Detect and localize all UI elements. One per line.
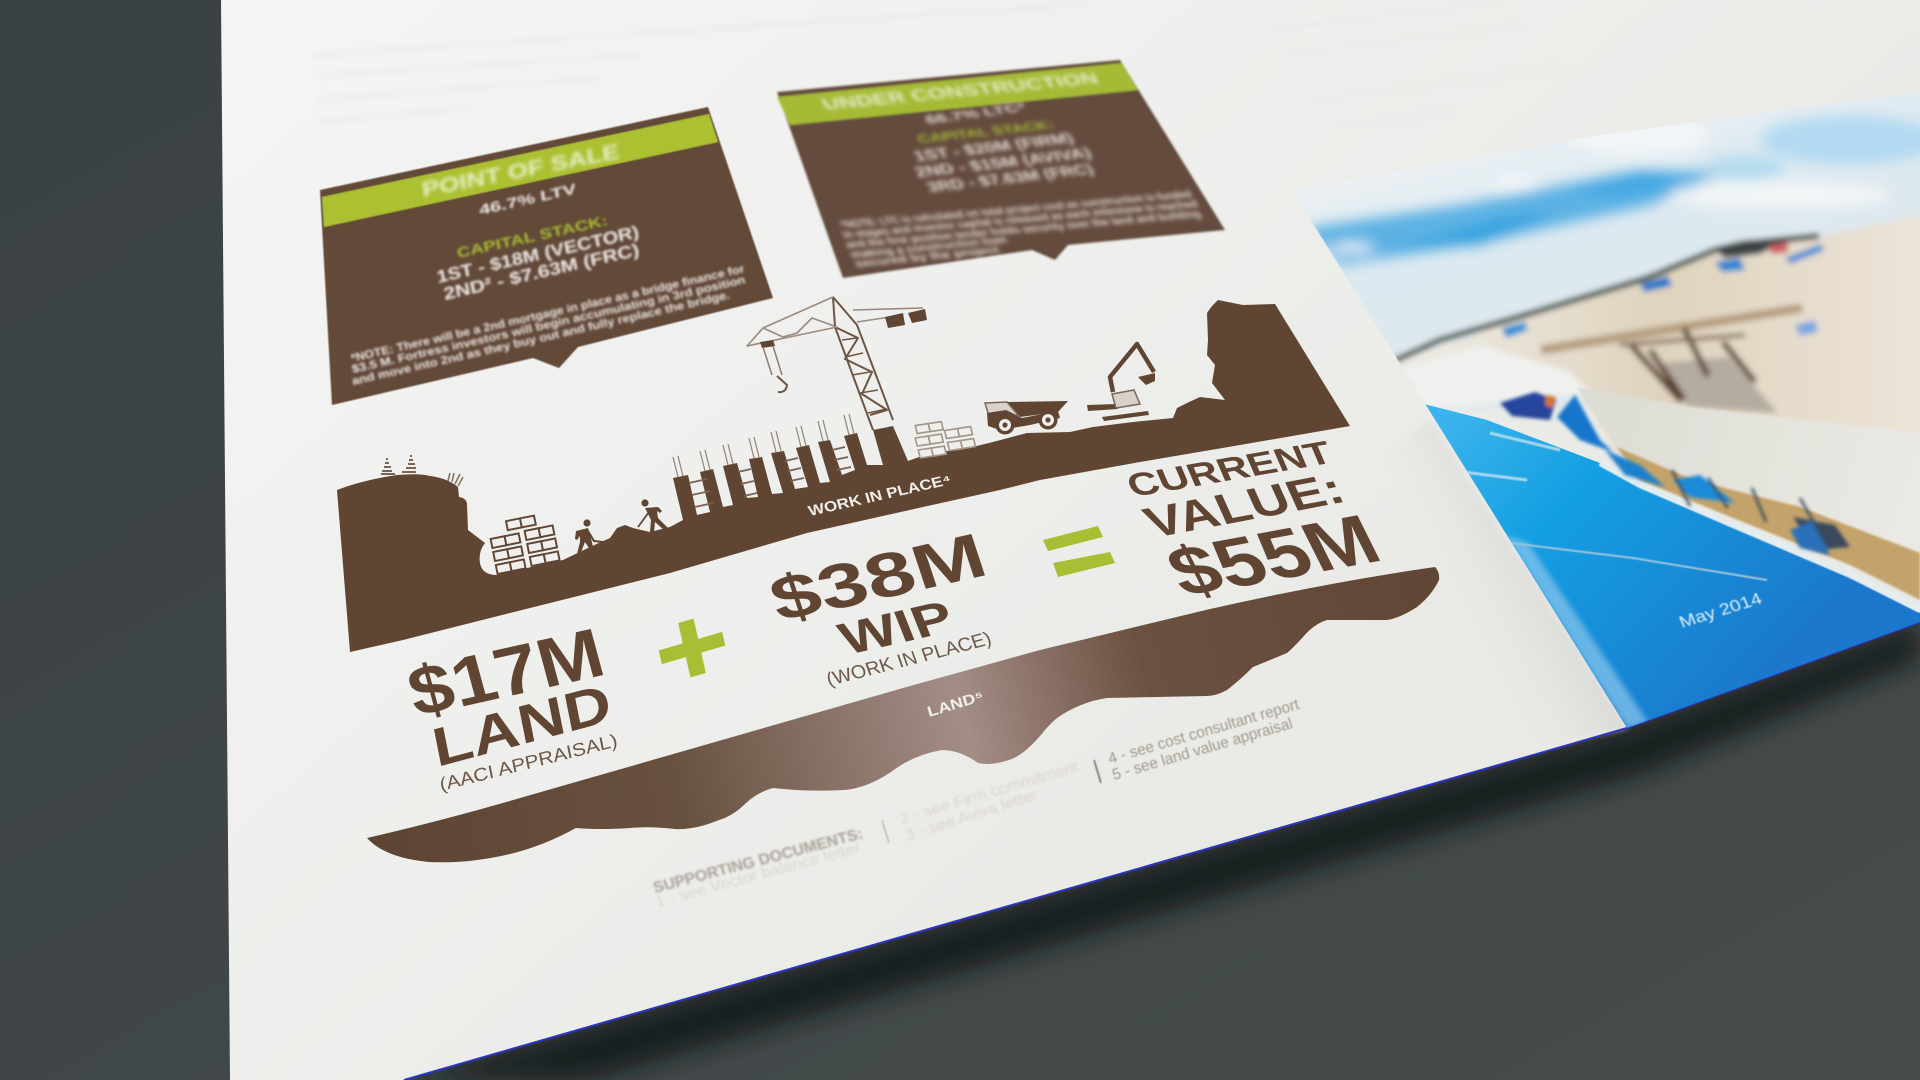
under construction text block: 2ND - $15M (AVIVA) bbox=[912, 146, 1095, 180]
under construction text block bbox=[838, 100, 1203, 270]
panel: point of sale bbox=[320, 107, 773, 405]
wip subheading: (WORK IN PLACE) bbox=[823, 627, 994, 690]
under construction text block: *NOTE: LTC is calculated on total project cost as construction is funded bbox=[838, 189, 1194, 231]
work in place land silhouette with columns bbox=[337, 300, 1350, 652]
retaining wall bbox=[1577, 387, 1920, 553]
value heading: VALUE: bbox=[1137, 465, 1352, 548]
blue tarps and debris bbox=[1500, 392, 1850, 555]
cover photo: construction site bbox=[1280, 80, 1920, 728]
wip heading: WIP bbox=[832, 592, 961, 665]
equation: land value bbox=[400, 614, 619, 795]
footnote column two bbox=[898, 758, 1081, 845]
equation: current value bbox=[1121, 434, 1393, 611]
under construction text block: 1ST - $20M (FIRM) bbox=[911, 131, 1077, 164]
point of sale text block: CAPITAL STACK: bbox=[455, 212, 609, 261]
site structure bbox=[1660, 357, 1778, 413]
icon: dump truck bbox=[985, 401, 1068, 434]
equation: work in place value: $38M bbox=[761, 520, 995, 636]
equation: work in place value bbox=[761, 520, 995, 690]
sky bbox=[1280, 80, 1920, 410]
point of sale heading: POINT OF SALE bbox=[421, 140, 621, 202]
tarp seams bbox=[1463, 433, 1767, 580]
point of sale text block bbox=[350, 180, 747, 388]
point of sale green band bbox=[322, 114, 718, 227]
footnote column three: 5 - see land value appraisal bbox=[1110, 715, 1295, 784]
cover date: May 2014 bbox=[1676, 590, 1765, 632]
icon: stacked crates middle bbox=[506, 512, 560, 569]
supporting documents footnotes bbox=[651, 696, 1302, 911]
footnote column one: SUPPORTING DOCUMENTS: bbox=[651, 825, 865, 897]
under construction callout box bbox=[777, 60, 1225, 278]
label: work in place: WORK IN PLACE⁴ bbox=[806, 472, 953, 520]
panel: under construction bbox=[777, 60, 1225, 278]
column rebar bbox=[673, 414, 854, 477]
debris strip along wall bbox=[1617, 447, 1920, 600]
under construction text block: in stages and investor capital is released as each milestone is reached bbox=[840, 199, 1200, 241]
footnote column two: 2 - see Firm commitment bbox=[898, 758, 1081, 828]
under construction text block: making a construction loan bbox=[848, 235, 1010, 261]
equation: land value: $17M bbox=[400, 614, 612, 732]
water and blue tarp bbox=[1420, 403, 1920, 728]
land heading: LAND bbox=[428, 673, 616, 779]
blue sky streaks bbox=[1305, 113, 1920, 265]
footnote column three: 4 - see cost consultant report bbox=[1106, 696, 1302, 768]
land subheading: (AACI APPRAISAL) bbox=[438, 730, 619, 795]
light sheen along fold bbox=[1505, 535, 1648, 728]
equals sign bbox=[1043, 526, 1115, 577]
column ladder rungs bbox=[689, 447, 851, 507]
under construction green band bbox=[777, 63, 1138, 125]
distant treeline bbox=[1394, 236, 1819, 361]
footnote column two: 3 - see Aviva letter bbox=[903, 786, 1040, 845]
photo background and distant scenery bbox=[1293, 92, 1920, 492]
plus sign bbox=[654, 611, 730, 685]
icon: stacked crates right bbox=[912, 418, 976, 458]
ground bbox=[1399, 216, 1920, 492]
under construction text block: and the first position lender holds security over the land and building bbox=[843, 209, 1203, 251]
icon: stacked crates left bbox=[491, 533, 526, 574]
icon: striped cones on hill bbox=[381, 456, 416, 474]
curb bbox=[1600, 463, 1920, 610]
point of sale text block: 46.7% LTV bbox=[478, 180, 578, 218]
icon: tower crane bbox=[747, 297, 927, 430]
under construction heading: UNDER CONSTRUCTION bbox=[819, 68, 1101, 114]
icon: worker shovelling bbox=[575, 519, 603, 554]
land strata shape bbox=[367, 567, 1439, 862]
paper fold shading bbox=[1370, 420, 1627, 748]
under construction text block: 3RD - $7.63M (FRC) bbox=[924, 162, 1097, 195]
label: land: LAND⁵ bbox=[925, 688, 986, 721]
under construction text block: 66.7% LTC* bbox=[922, 100, 1028, 127]
point of sale text block: 2ND² - $7.63M (FRC) bbox=[442, 239, 641, 304]
illustration: work in place ground bbox=[337, 297, 1350, 652]
point of sale text block: and move into 2nd as they buy out and fully replace the bridge. bbox=[351, 289, 731, 388]
point of sale callout box bbox=[320, 107, 773, 405]
under construction text block: CAPITAL STACK: bbox=[914, 118, 1057, 146]
point of sale text block: $3.5 M. Fortress investors will begin accumulating in 3rd position bbox=[351, 274, 747, 376]
snow berm bbox=[1400, 345, 1590, 410]
brochure blue bottom edge bbox=[404, 622, 1920, 1080]
under construction text block: secured by the project bbox=[852, 245, 1002, 270]
icon: worker with shovel bbox=[638, 499, 668, 532]
footnote column one: 1 - see Vector balance letter bbox=[653, 839, 863, 911]
shadow under brochure bbox=[404, 622, 1920, 1080]
point of sale text block: 1ST - $18M (VECTOR) bbox=[435, 221, 641, 287]
icon: excavator bbox=[1087, 344, 1155, 421]
point of sale text block: *NOTE: There will be a 2nd mortgage in place as a bridge finance for bbox=[350, 263, 746, 365]
value amount: $55M bbox=[1154, 500, 1393, 611]
icon: grass tuft bbox=[448, 473, 463, 486]
equation: current value: CURRENT bbox=[1121, 434, 1338, 504]
